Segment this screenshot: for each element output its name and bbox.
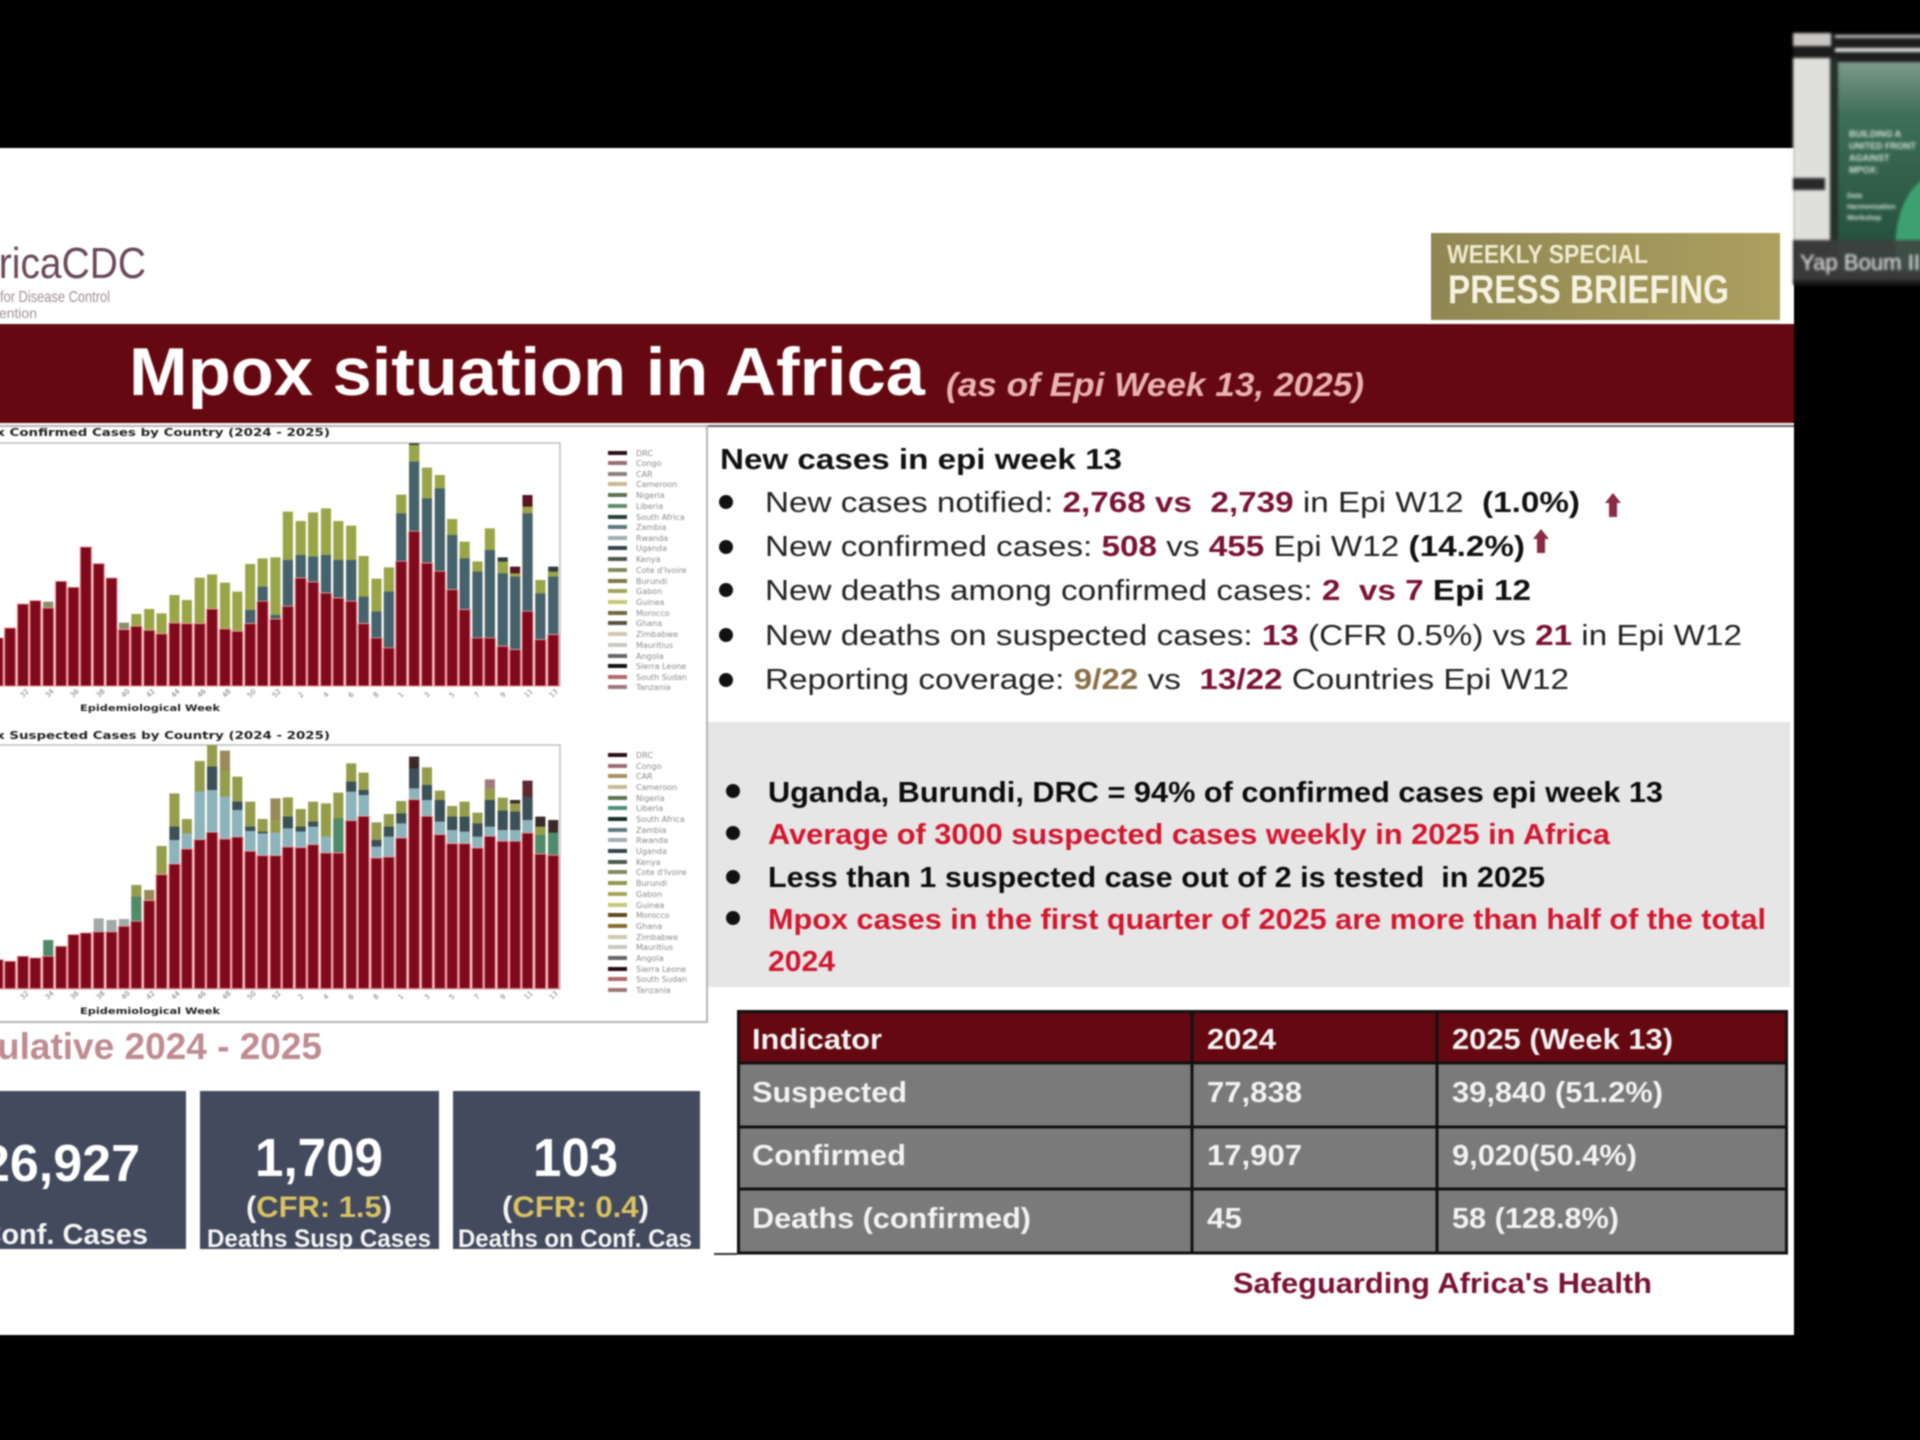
bullet: reporting coverage: Reporting coverage: 9/22 vs 13/22 Countries Epi W12 — [765, 664, 1569, 696]
x axis labels: suspected chart: 50 — [246, 989, 258, 1001]
legend: suspected chart: South Sudan — [636, 975, 687, 984]
legend: confirmed chart: South Africa — [636, 513, 685, 522]
x axis labels: suspected chart: 5 — [448, 993, 457, 1001]
legend: suspected chart: DRC — [636, 751, 653, 760]
screen text: Data — [1847, 193, 1862, 200]
x axis labels: suspected chart: 38 — [95, 989, 107, 1001]
legend: confirmed chart: Uganda — [636, 544, 667, 553]
card: deaths on confirmed cases: (CFR: 0.4) — [502, 1191, 649, 1224]
legend: confirmed chart: Congo — [636, 459, 662, 468]
legend: suspected chart: Sierra Leone — [636, 965, 686, 974]
screen text — [1847, 129, 1916, 222]
x axis labels: confirmed chart: 9 — [499, 691, 508, 699]
row: suspected: 77,838 — [1207, 1077, 1302, 1109]
x axis labels: confirmed chart: 36 — [69, 687, 81, 699]
legend: confirmed chart: Mauritius — [636, 641, 673, 650]
speaker name: Yap Boum II — [1800, 250, 1920, 275]
footer tagline: Safeguarding Africa's Health — [1233, 1268, 1652, 1300]
panel: key messages: Uganda, Burundi, DRC = 94% of confirmed cases epi week 13 — [768, 777, 1663, 809]
x axis labels: confirmed chart: 52 — [271, 687, 283, 699]
x axis labels: confirmed chart: 42 — [145, 687, 157, 699]
legend: suspected chart: Zambia — [636, 826, 666, 835]
legend: suspected chart: Angola — [636, 954, 664, 963]
x axis labels: confirmed chart: 32 — [19, 687, 31, 699]
x axis labels: confirmed chart: 46 — [196, 687, 208, 699]
x axis labels: suspected chart: 6 — [347, 992, 356, 1001]
axis title: confirmed chart: Epidemiological Week — [80, 704, 221, 714]
card: deaths on suspected cases: (CFR: 1.5) — [246, 1191, 392, 1224]
x axis labels: confirmed chart: 48 — [221, 687, 233, 699]
x axis labels: suspected chart: 36 — [69, 989, 81, 1001]
name bar — [1793, 240, 1920, 280]
legend: confirmed chart: Kenya — [636, 555, 661, 564]
screen text: MPOX: — [1849, 165, 1879, 175]
x axis labels: suspected chart: 3 — [423, 993, 432, 1001]
legend: suspected chart: Uganda — [636, 847, 667, 856]
x axis labels: suspected chart — [19, 989, 560, 1001]
x axis labels: suspected chart: 13 — [548, 989, 560, 1001]
table header: 2024 — [1207, 1024, 1276, 1056]
x axis labels: suspected chart: 8 — [372, 993, 381, 1001]
legend: confirmed chart: Tanzania — [635, 683, 671, 692]
x axis labels: suspected chart: 1 — [397, 993, 406, 1001]
bullet: new cases notified: New cases notified: 2,768 vs 2,739 in Epi W12 (1.0%) — [765, 487, 1580, 519]
screen text: BUILDING A — [1849, 129, 1902, 139]
x axis labels: suspected chart: 32 — [19, 989, 31, 1001]
x axis labels: confirmed chart: 7 — [473, 691, 482, 699]
axis title: suspected chart: Epidemiological Week — [80, 1007, 221, 1017]
legend: confirmed chart — [608, 449, 687, 692]
legend: confirmed chart: Burundi — [636, 577, 667, 586]
row: suspected: 39,840 (51.2%) — [1452, 1077, 1663, 1109]
legend: suspected chart: Burundi — [636, 879, 667, 888]
table header: 2025 (Week 13) — [1452, 1024, 1673, 1056]
x axis labels: confirmed chart: 50 — [246, 687, 258, 699]
legend: confirmed chart: Sierra Leone — [636, 662, 686, 671]
legend: suspected chart — [608, 751, 687, 995]
x axis labels: confirmed chart: 1 — [397, 691, 406, 699]
legend: confirmed chart: South Sudan — [636, 673, 687, 682]
x axis labels: confirmed chart: 4 — [322, 690, 331, 699]
x axis labels: confirmed chart: 38 — [95, 687, 107, 699]
x axis labels: suspected chart: 48 — [221, 989, 233, 1001]
legend: suspected chart: Congo — [636, 762, 662, 771]
legend: suspected chart: Zimbabwe — [636, 933, 678, 942]
badge: weekly special press briefing: WEEKLY SPECIAL — [1447, 239, 1648, 269]
legend: suspected chart: Tanzania — [635, 986, 671, 995]
table header — [752, 1024, 1673, 1056]
row: deaths confirmed: 58 (128.8%) — [1452, 1203, 1619, 1235]
row: confirmed: Confirmed — [752, 1140, 906, 1172]
x axis labels: suspected chart: 46 — [196, 989, 208, 1001]
legend: suspected chart: Mauritius — [636, 943, 673, 952]
legend: suspected chart: CAR — [636, 772, 653, 781]
legend: confirmed chart: Angola — [636, 652, 664, 661]
legend: suspected chart: Cote d'Ivoire — [636, 868, 687, 877]
x axis labels: suspected chart: 34 — [44, 989, 56, 1001]
legend: suspected chart: Gabon — [636, 890, 662, 899]
chart: suspected cases stacked bars — [0, 745, 560, 989]
video thumbnail: speaker — [1793, 33, 1920, 285]
panel: key messages: Average of 3000 suspected cases weekly in 2025 in Africa — [768, 819, 1611, 851]
panel: key messages: 2024 — [768, 946, 835, 978]
row: confirmed: 17,907 — [1207, 1140, 1302, 1172]
legend: confirmed chart: Ghana — [636, 619, 662, 628]
card: deaths on suspected cases — [200, 1091, 439, 1253]
x axis labels: confirmed chart: 6 — [347, 690, 356, 699]
bullet: new deaths suspected: New deaths on suspected cases: 13 (CFR 0.5%) vs 21 in Epi W12 — [765, 620, 1742, 652]
x axis labels: suspected chart: 4 — [322, 992, 331, 1001]
legend: suspected chart: Liberia — [636, 804, 663, 813]
chart: confirmed cases stacked bars — [0, 443, 560, 686]
x axis labels: confirmed chart: 44 — [170, 687, 182, 699]
title banner: (as of Epi Week 13, 2025) — [946, 366, 1364, 403]
x axis labels: confirmed chart: 3 — [423, 691, 432, 699]
screen text: AGAINST — [1849, 153, 1890, 163]
x axis labels: suspected chart: 40 — [120, 989, 132, 1001]
panel: key messages: Mpox cases in the first quarter of 2025 are more than half of the total — [768, 904, 1766, 936]
icon: up arrow — [1605, 493, 1621, 517]
legend: suspected chart: Morocco — [636, 911, 670, 920]
panel: epidemic curves — [0, 426, 707, 1022]
title banner: Mpox situation in Africa — [129, 334, 926, 410]
title banner — [0, 324, 1794, 423]
bullet: new confirmed cases: New confirmed cases: 508 vs 455 Epi W12 (14.2%) — [765, 531, 1525, 563]
heading: new cases: New cases in epi week 13 — [720, 444, 1122, 476]
legend: suspected chart: Guinea — [636, 901, 664, 910]
x axis labels: suspected chart: 52 — [271, 989, 283, 1001]
panel: key messages — [708, 722, 1790, 987]
card: deaths on confirmed cases: 103 — [533, 1128, 618, 1188]
row: suspected: Suspected — [752, 1077, 907, 1109]
legend: confirmed chart: CAR — [636, 470, 653, 479]
card: deaths on suspected cases: Deaths Susp Cases — [207, 1225, 431, 1253]
legend: confirmed chart: Guinea — [636, 598, 664, 607]
x axis labels: confirmed chart — [19, 687, 560, 699]
legend: confirmed chart: Gabon — [636, 587, 662, 596]
row: confirmed: 9,020(50.4%) — [1452, 1140, 1637, 1172]
x axis labels: confirmed chart: 13 — [548, 687, 560, 699]
x axis labels: confirmed chart: 8 — [372, 691, 381, 699]
icon: up arrow — [1533, 529, 1549, 553]
legend: suspected chart: Nigeria — [636, 794, 665, 803]
slide background — [0, 148, 1794, 1335]
x axis labels: confirmed chart: 34 — [44, 687, 56, 699]
card: deaths on confirmed cases: Deaths on Conf. Cas — [458, 1225, 692, 1253]
legend: confirmed chart: Morocco — [636, 609, 670, 618]
screen text: Harmonization — [1847, 204, 1896, 211]
legend: confirmed chart: Zambia — [636, 523, 666, 532]
legend: suspected chart: Kenya — [636, 858, 661, 867]
legend: confirmed chart: Liberia — [636, 502, 663, 511]
legend: suspected chart: Cameroon — [636, 783, 677, 792]
card: deaths on suspected cases: 1,709 — [255, 1128, 383, 1188]
text block: new cases in epi week 13 — [719, 444, 1742, 696]
x axis labels: confirmed chart: 5 — [448, 691, 457, 699]
row: deaths confirmed: Deaths (confirmed) — [752, 1203, 1031, 1235]
x axis labels: suspected chart: 11 — [523, 989, 535, 1001]
x axis labels: suspected chart: 44 — [170, 989, 182, 1001]
screen text: Workshop — [1847, 215, 1881, 222]
badge: weekly special press briefing — [1431, 233, 1780, 320]
x axis labels: suspected chart: 7 — [473, 993, 482, 1001]
x axis labels: suspected chart: 2 — [297, 993, 306, 1001]
x axis labels: confirmed chart: 11 — [523, 687, 535, 699]
card: confirmed cases — [0, 1091, 186, 1251]
legend: confirmed chart: DRC — [636, 449, 653, 458]
row: suspected — [752, 1077, 1663, 1109]
legend: confirmed chart: Nigeria — [636, 491, 665, 500]
bullet: new deaths confirmed: New deaths among confirmed cases: 2 vs 7 Epi 12 — [765, 575, 1531, 607]
x axis labels: confirmed chart: 2 — [297, 691, 306, 699]
screen text: UNITED FRONT — [1849, 141, 1916, 151]
legend: suspected chart: Ghana — [636, 922, 662, 931]
logo: Africa CDC — [0, 239, 146, 321]
legend: confirmed chart: Cameroon — [636, 480, 677, 489]
table header: Indicator — [752, 1024, 882, 1056]
legend: suspected chart: Rwanda — [636, 836, 668, 845]
row: deaths confirmed: 45 — [1207, 1203, 1242, 1235]
legend: confirmed chart: Rwanda — [636, 534, 668, 543]
card: deaths on confirmed cases — [453, 1091, 700, 1253]
table: indicators 2024 vs 2025 — [737, 1010, 1788, 1254]
legend: confirmed chart: Zimbabwe — [636, 630, 678, 639]
x axis labels: suspected chart: 9 — [499, 993, 508, 1001]
row: deaths confirmed — [752, 1203, 1619, 1235]
x axis labels: suspected chart: 42 — [145, 989, 157, 1001]
row: confirmed — [752, 1140, 1637, 1172]
badge: weekly special press briefing: PRESS BRIEFING — [1448, 268, 1729, 312]
legend: suspected chart: South Africa — [636, 815, 685, 824]
panel: key messages: Less than 1 suspected case out of 2 is tested in 2025 — [768, 862, 1545, 894]
x axis labels: confirmed chart: 40 — [120, 687, 132, 699]
legend: confirmed chart: Cote d'Ivoire — [636, 566, 687, 575]
